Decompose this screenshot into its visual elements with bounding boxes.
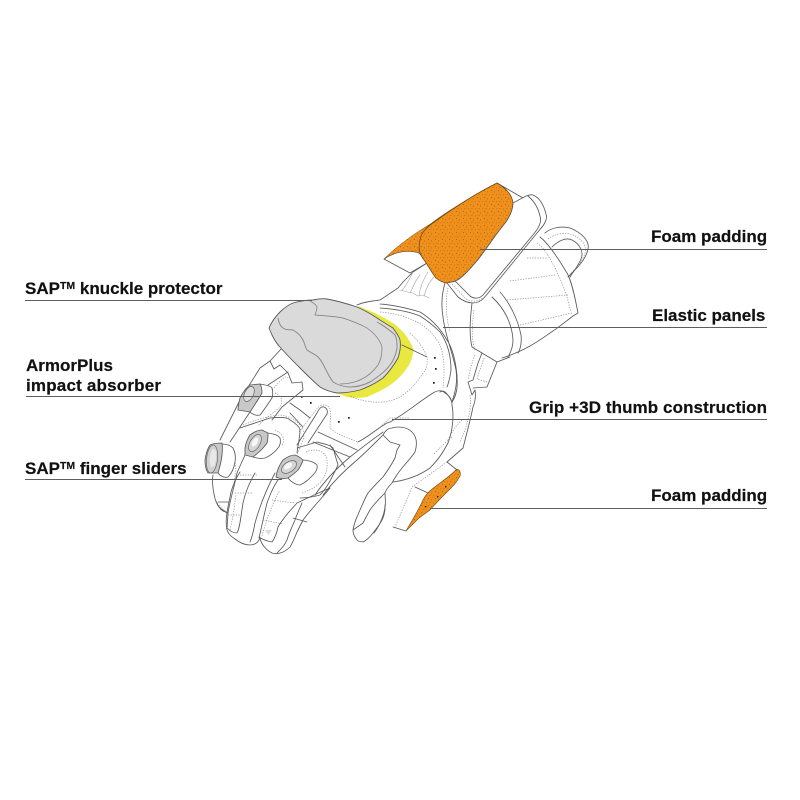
palm curve and wrist edge: [390, 391, 453, 482]
orange left wing: [384, 183, 497, 259]
thumb gusset: [393, 462, 457, 531]
callout: SAP knuckle protector: TM: [60, 280, 75, 292]
wrist panels: [442, 283, 510, 462]
foam padding: wrist flap: [384, 183, 523, 283]
cuff: [502, 237, 578, 358]
glove illustration: [205, 183, 588, 554]
finger 2: [227, 455, 255, 533]
knuckle tab: [268, 361, 303, 420]
pads behind sliders: [250, 384, 273, 415]
wrist strap: [447, 195, 547, 303]
protector inner line: [310, 301, 382, 384]
strips across knuckles: [290, 403, 357, 467]
callout: ArmorPlus impact absorber: ArmorPlus: [26, 356, 113, 375]
left finger pad: [217, 502, 229, 512]
callout: foam padding bottom: Foam padding: [651, 486, 767, 505]
palm lines: [315, 432, 383, 495]
protector ridge: [278, 318, 397, 387]
callout: SAP finger sliders: finger sliders: [75, 459, 187, 478]
SAP knuckle protector: [269, 299, 400, 393]
knuckle stitch line: [402, 345, 427, 357]
callout: elastic panels: Elastic panels: [652, 306, 765, 325]
finger pad 3 surround: [297, 442, 338, 498]
callout: grip thumb construction: Grip +3D thumb construction: [529, 398, 767, 417]
wrist folds: [357, 263, 434, 305]
SAP finger sliders: [205, 384, 303, 479]
tendon loop: [297, 407, 327, 445]
callout: ArmorPlus impact absorber: impact absorber: [26, 376, 161, 395]
knuckle area arcs: [380, 304, 457, 402]
cuff loop strap: [545, 227, 588, 277]
callout: SAP finger sliders: SAP: [25, 459, 60, 478]
callout: SAP knuckle protector: [25, 279, 312, 300]
callout: SAP knuckle protector: knuckle protector: [75, 279, 223, 298]
ArmorPlus yellow absorber: [337, 306, 413, 398]
callout: SAP finger sliders: TM: [60, 460, 75, 472]
left outer finger contour: [213, 475, 330, 554]
foam padding: palm edge: [406, 469, 460, 531]
thumb: [353, 427, 416, 542]
orange main patch: [419, 183, 513, 283]
dots: [301, 357, 437, 423]
flap white underside: [384, 251, 436, 278]
fingers and hand: [213, 347, 437, 554]
callout: foam padding top: Foam padding: [651, 227, 767, 246]
finger 3: [259, 488, 330, 542]
callout: ArmorPlus impact absorber: [26, 356, 340, 396]
cuff band: [492, 292, 521, 357]
callout: SAP knuckle protector: SAP: [25, 279, 60, 298]
finger pad 2 surround: [240, 417, 300, 453]
left hand edge: [220, 347, 283, 442]
callout: SAP finger sliders: [25, 459, 282, 480]
